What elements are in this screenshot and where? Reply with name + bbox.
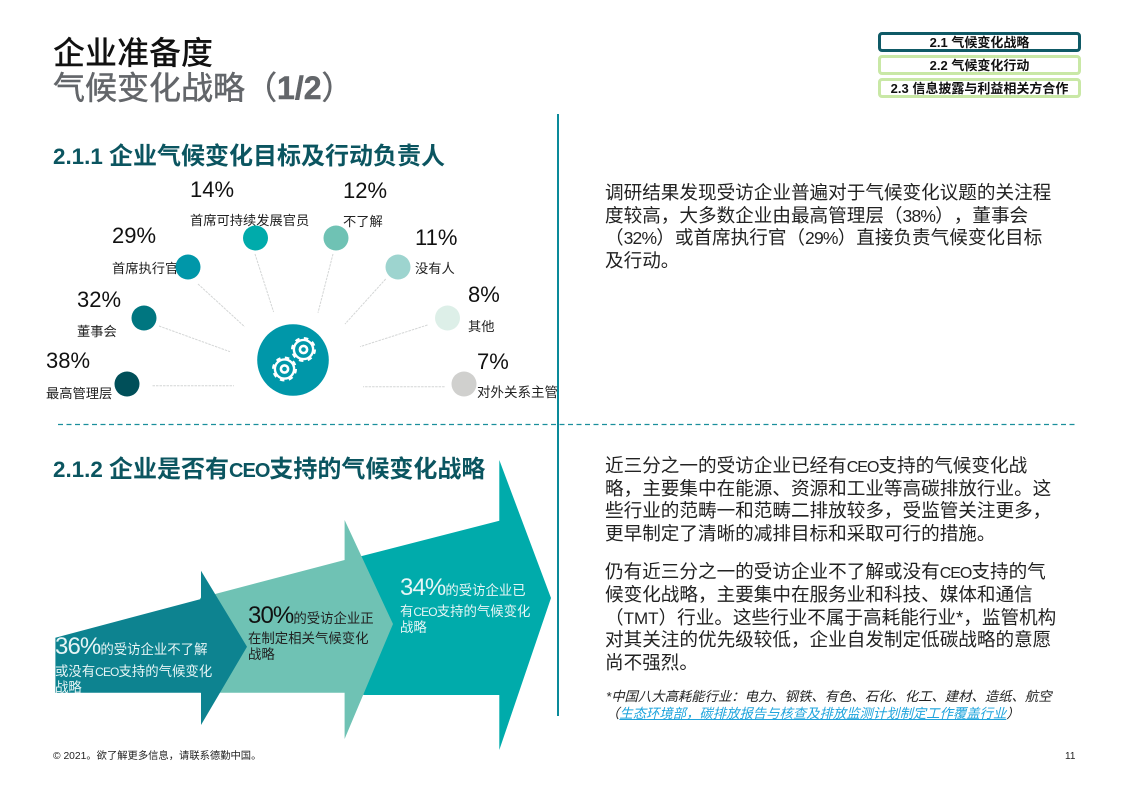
stat: 38%	[46, 348, 112, 401]
title line 1: 企业准备度	[53, 35, 213, 71]
nav: 2.2: 2.2 气候变化行动	[930, 58, 1029, 73]
arrow text: 30%	[248, 602, 374, 662]
stat: 38%: 最高管理层	[46, 386, 112, 401]
body text: CEO strategy: 略，主要集中在能源、资源和工业等高碳排放行业。这	[605, 478, 1051, 498]
stat: 7%: 对外关系主管	[477, 385, 558, 400]
stat: 32%: 董事会	[77, 324, 117, 339]
nav: 2.2	[878, 55, 1081, 75]
radial responsibility chart	[114, 226, 476, 396]
footnote: *中国八大高耗能行业：电力、钢铁、有色、石化、化工、建材、造纸、航空	[606, 689, 1052, 704]
stat: 14%: 首席可持续发展官员	[190, 213, 309, 228]
stat: 11%	[415, 225, 457, 276]
stat: 12%: 不了解	[343, 214, 383, 229]
stat: 29%: 首席执行官	[112, 261, 178, 276]
footnote: （生态环境部，碳排放报告与核查及排放监测计划制定工作覆盖行业）	[606, 706, 1020, 720]
body text: 2.1.1 findings: 调研结果发现受访企业普遍对于气候变化议题的关注程	[605, 182, 1051, 203]
stat: 7%	[477, 349, 558, 400]
footnote	[606, 689, 1053, 720]
stat: 14%	[190, 177, 309, 228]
body text: no CEO strategy	[605, 561, 1056, 673]
arrow text: 36%: 战略	[55, 680, 82, 695]
stat: 11%: 没有人	[415, 261, 455, 276]
stat: 14%: 14%	[190, 177, 234, 202]
stat: 8%: 其他	[468, 319, 495, 334]
arrow text: 30%: 30%的受访企业正	[248, 602, 374, 629]
stat: 29%: 29%	[112, 223, 156, 248]
vertical divider	[557, 114, 559, 716]
nav: 2.3	[878, 78, 1081, 98]
body text: 2.1.1 findings: 及行动。	[605, 250, 679, 270]
body text: CEO strategy: 更早制定了清晰的减排目标和采取可行的措施。	[605, 522, 995, 544]
arrow text: 34%: 战略	[400, 620, 427, 635]
body text: no CEO strategy: （TMT）行业。这些行业不属于高耗能行业*，监管机构	[605, 606, 1056, 628]
stat: 8%	[468, 282, 500, 334]
body text: no CEO strategy: 仍有近三分之一的受访企业不了解或没有CEO支持的气	[605, 561, 1046, 582]
arrow text: 34%: 34%的受访企业已	[400, 574, 526, 601]
body text: no CEO strategy: 尚不强烈。	[605, 652, 698, 673]
stat: 11%: 11%	[415, 225, 457, 250]
stat: 7%: 7%	[477, 349, 509, 374]
body text: CEO strategy: 些行业的范畴一和范畴二排放较多，受监管关注更多，	[605, 500, 1051, 521]
nav: 2.1: 2.1 气候变化战略	[930, 35, 1029, 50]
arrow text: 36%: 36%的受访企业不了解	[55, 633, 207, 660]
arrow text: 30%: 在制定相关气候变化	[248, 631, 369, 646]
stat: 32%: 32%	[77, 287, 121, 312]
title line 2: 气候变化战略（1/2）	[53, 70, 354, 106]
body text: no CEO strategy: 对其关注的优先级较低，企业自发制定低碳战略的意愿	[605, 629, 1051, 650]
title	[53, 35, 354, 106]
body text: CEO strategy: 近三分之一的受访企业已经有CEO支持的气候变化战	[605, 455, 1027, 476]
stat: 29%	[112, 223, 178, 276]
nav: 2.3: 2.3 信息披露与利益相关方合作	[891, 81, 1068, 96]
body text: no CEO strategy: 候变化战略，主要集中在服务业和科技、媒体和通信	[605, 584, 1033, 605]
heading 2.1.1: 2.1.1 企业气候变化目标及行动负责人	[53, 143, 445, 170]
body text: 2.1.1 findings	[605, 182, 1051, 270]
arrow text: 30%: 战略	[248, 647, 275, 662]
body text: 2.1.1 findings: （32%）或首席执行官（29%）直接负责气候变化目标	[605, 227, 1042, 248]
copyright footer: © 2021。欲了解更多信息，请联系德勤中国。	[53, 751, 261, 762]
body text: CEO strategy	[605, 455, 1051, 544]
section navigation	[878, 32, 1081, 98]
arrow text: 34%: 有CEO支持的气候变化	[400, 604, 530, 619]
stat: 32%	[77, 287, 121, 339]
heading 2.1.2: 2.1.2 企业是否有CEO支持的气候变化战略	[53, 456, 485, 483]
body text: 2.1.1 findings: 度较高，大多数企业由最高管理层（38%），董事会	[605, 204, 1028, 226]
nav: 2.1	[878, 32, 1081, 52]
stat: 12%: 12%	[343, 178, 387, 203]
stat: 12%	[343, 178, 387, 229]
page number: 11	[1065, 751, 1075, 762]
arrow text: 36%	[55, 633, 212, 695]
arrow text: 34%	[400, 574, 530, 635]
arrow text: 36%: 或没有CEO支持的气候变化	[55, 664, 212, 679]
stat: 38%: 38%	[46, 348, 90, 373]
stat: 8%: 8%	[468, 282, 500, 307]
arrow chart	[55, 460, 551, 750]
